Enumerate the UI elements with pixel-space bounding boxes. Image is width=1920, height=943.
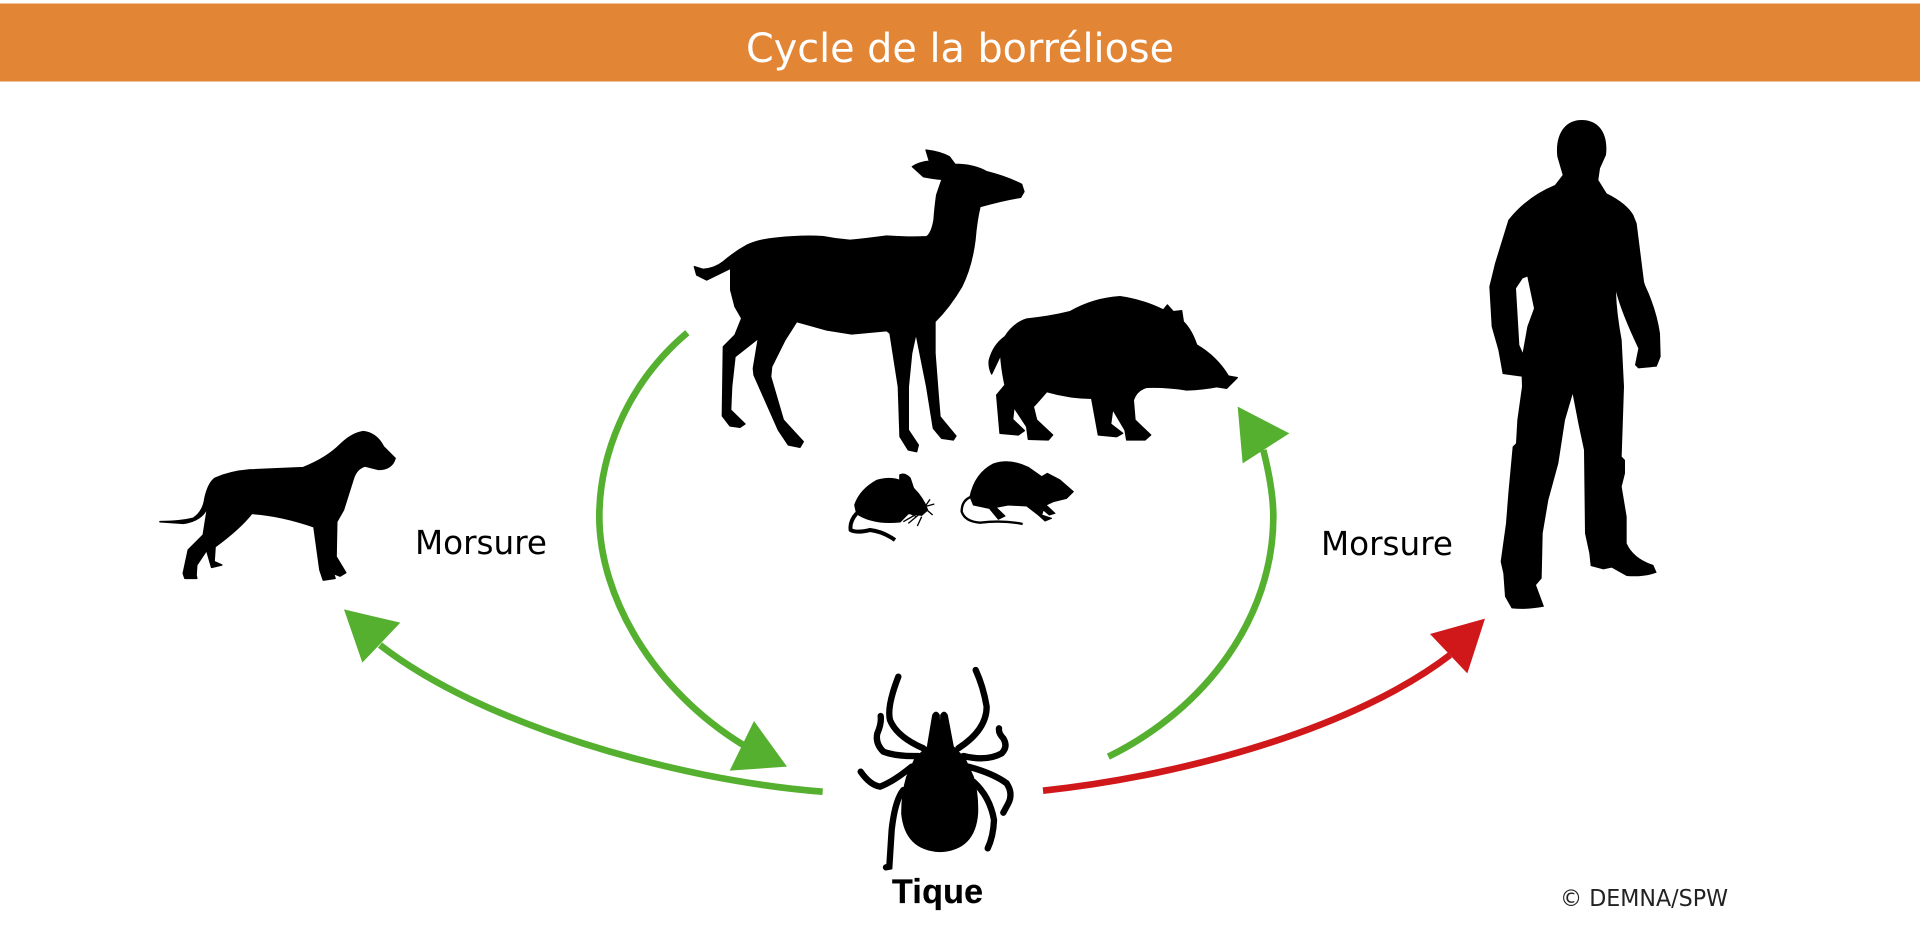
icon: tick silhouette — [861, 670, 1010, 867]
icon: wild boar silhouette — [989, 297, 1237, 440]
label: Tique: Tique — [892, 873, 983, 911]
icon: rat silhouette — [962, 462, 1073, 524]
label: Morsure right: Morsure — [1321, 524, 1453, 563]
title banner: Cycle de la borréliose — [746, 26, 1174, 72]
icon: deer silhouette — [694, 150, 1024, 452]
icon: dog silhouette — [160, 432, 395, 580]
arrow: tick to boar — [1108, 407, 1289, 757]
label: Morsure left: Morsure — [415, 523, 547, 562]
icon: mouse silhouette — [850, 474, 934, 540]
credit: © DEMNA/SPW — [1560, 886, 1728, 912]
icon: human silhouette — [1489, 120, 1661, 609]
arrow: deer to tick — [599, 333, 787, 771]
arrow: tick to dog — [344, 609, 823, 792]
arrow: tick to human — [1043, 619, 1485, 791]
title banner — [0, 4, 1920, 82]
